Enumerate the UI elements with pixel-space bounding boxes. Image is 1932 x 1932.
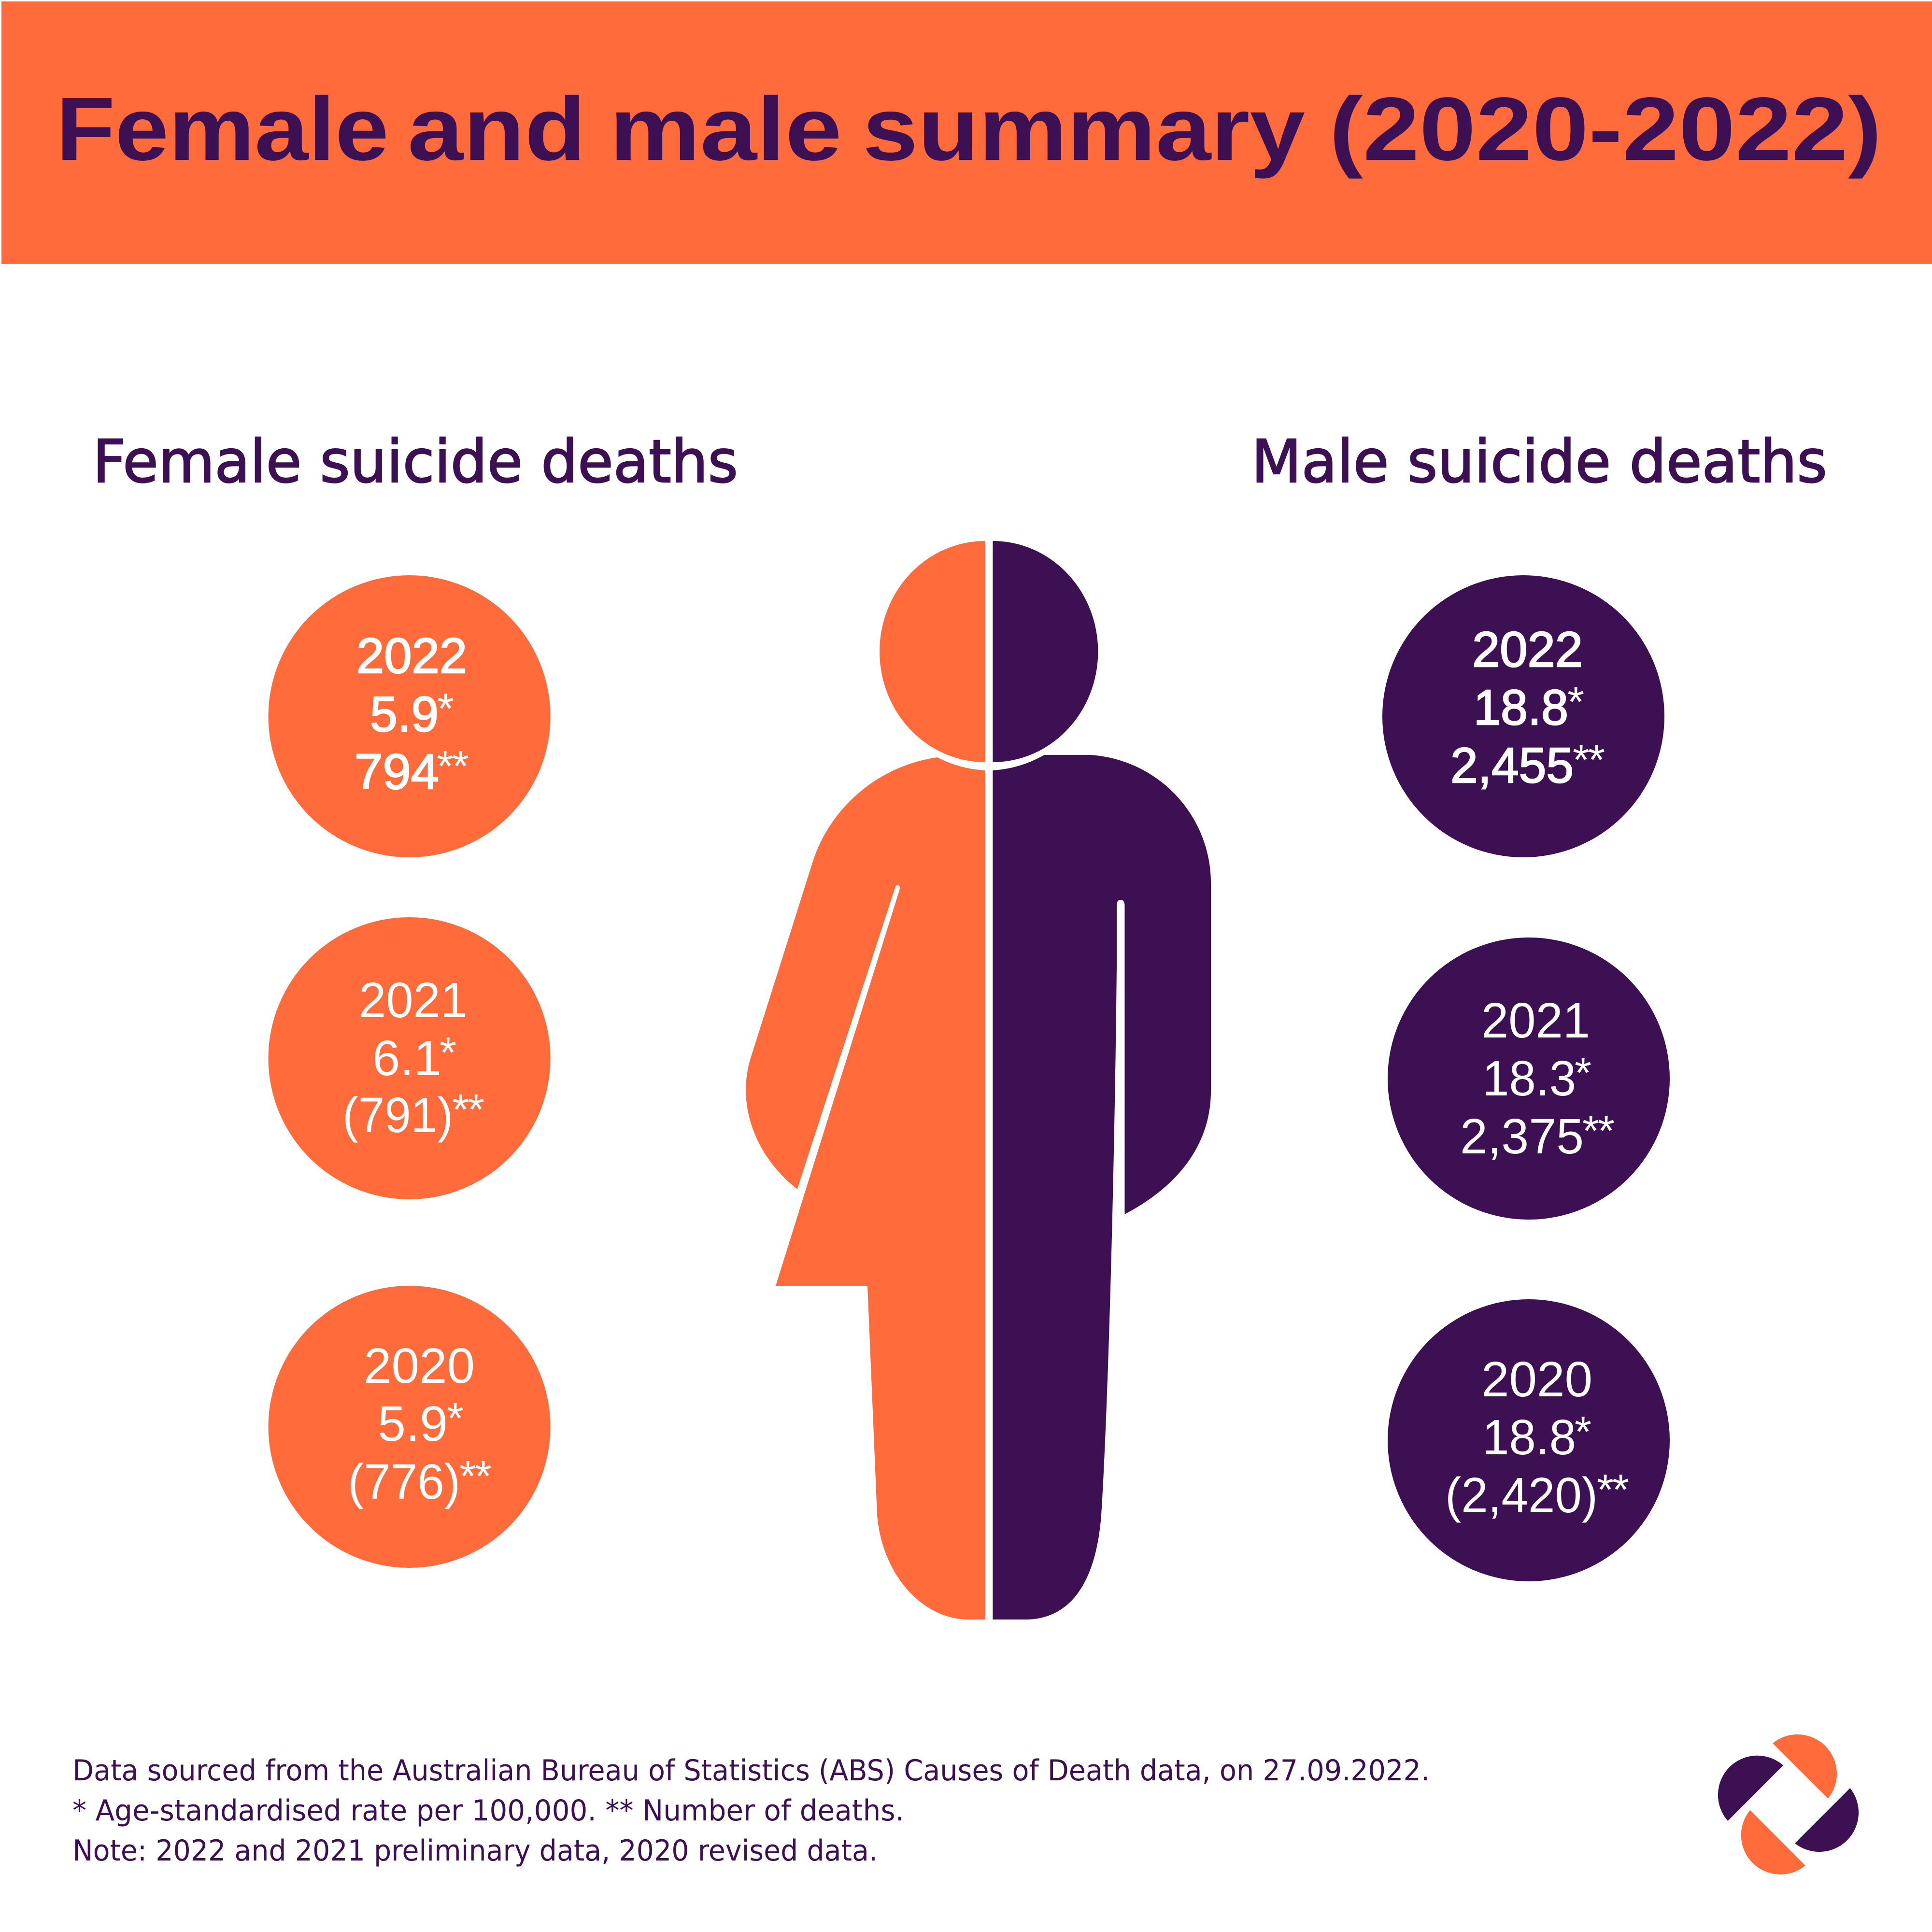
male circle 2021: 2,375: [1460, 1108, 1584, 1164]
male circle 2020: [1388, 1299, 1670, 1581]
footnotes: Note: 2022 and 2021 preliminary data, 2020 revised data.: [72, 1834, 878, 1868]
male circle 2022: 18.8: [1474, 680, 1568, 735]
male circle 2021: 18.3: [1482, 1051, 1576, 1106]
title: [56, 79, 1882, 179]
female circle 2021: [269, 917, 551, 1199]
female circle 2022: *: [437, 685, 454, 733]
male circle 2021: **: [1582, 1107, 1614, 1155]
title: and: [408, 79, 586, 179]
male half of head: [993, 541, 1098, 762]
female circle 2022: **: [437, 742, 469, 791]
female circle 2021: 2021: [359, 972, 468, 1028]
male half of body: [993, 755, 1211, 1619]
footnotes: [72, 1754, 1430, 1868]
heading: female suicide deaths: Female suicide deaths: [93, 427, 738, 496]
male circle 2022: 2022: [1472, 622, 1583, 677]
footnotes: * Age-standardised rate per 100,000. ** Number of deaths.: [72, 1794, 904, 1828]
male circle 2021: *: [1575, 1049, 1591, 1097]
female circle 2020: [269, 1286, 551, 1568]
female circle 2022: 794: [355, 744, 439, 799]
male circle 2021: 2021: [1481, 993, 1590, 1048]
header banner: [1, 1, 1932, 264]
female circle 2020: (776): [348, 1454, 460, 1509]
male circle 2020: (2,420): [1445, 1467, 1598, 1523]
title: summary: [863, 79, 1305, 179]
female circle 2021: 6.1: [372, 1030, 441, 1086]
logo: purple bottom-right half disc: [1795, 1788, 1859, 1852]
female circle 2022: 2022: [356, 628, 467, 683]
male circle 2022: **: [1573, 736, 1605, 784]
figure: split female and male person: [746, 541, 1211, 1619]
male circle 2020: *: [1575, 1408, 1591, 1456]
female circle 2021: (791): [342, 1087, 453, 1143]
footnotes: Data sourced from the Australian Bureau of Statistics (ABS) Causes of Death data, on 27.09.2022.: [72, 1754, 1430, 1788]
logo: [1718, 1734, 1859, 1875]
male circle 2020: 2020: [1481, 1351, 1592, 1407]
logo: orange bottom half disc: [1741, 1810, 1805, 1875]
logo: purple top-left half disc: [1718, 1756, 1783, 1821]
male circle 2022: *: [1567, 678, 1584, 726]
title: male: [610, 79, 842, 179]
female circle 2021: *: [440, 1029, 456, 1077]
male circle 2022: 2,455: [1450, 738, 1574, 793]
female circle 2021: **: [452, 1086, 484, 1134]
male circle 2021: [1388, 938, 1670, 1220]
male circle 2020: 18.8: [1482, 1409, 1576, 1465]
female half of head: [880, 541, 985, 762]
female circle 2022: 5.9: [370, 686, 439, 742]
logo: orange top half disc: [1773, 1734, 1837, 1799]
female half of body: [746, 757, 985, 1619]
title: Female: [56, 79, 389, 179]
male circle 2020: **: [1597, 1466, 1629, 1514]
female circle 2020: 2020: [364, 1338, 475, 1393]
title: (2020-2022): [1329, 79, 1882, 179]
female circle 2020: **: [459, 1452, 491, 1501]
female circle 2020: 5.9: [378, 1396, 448, 1451]
female circle 2020: *: [447, 1394, 463, 1443]
male circle 2022: [1382, 575, 1664, 857]
female circle 2022: [269, 575, 551, 857]
heading: male suicide deaths: Male suicide deaths: [1251, 427, 1827, 496]
